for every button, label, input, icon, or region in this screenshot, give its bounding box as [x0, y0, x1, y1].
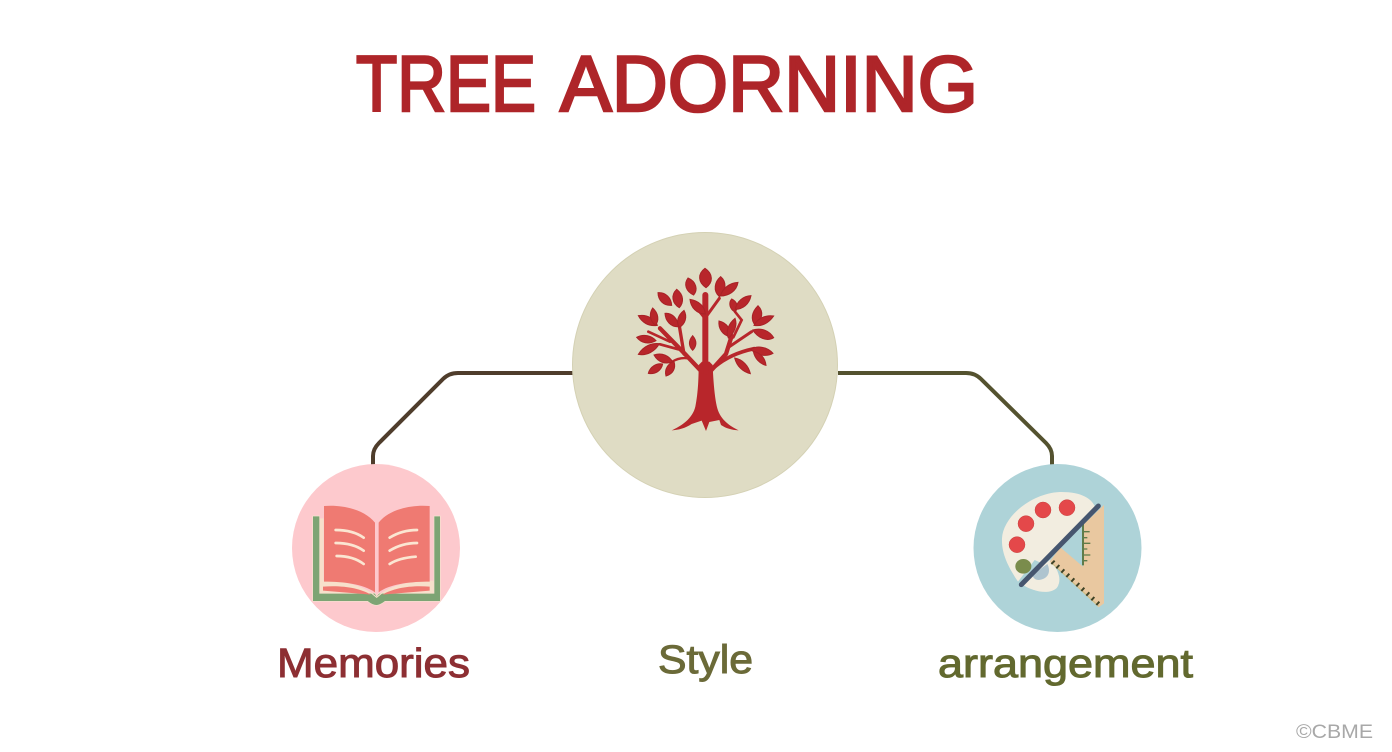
label: memories: Memories — [277, 640, 470, 686]
palette — [1002, 492, 1096, 592]
connector: tree to memories — [373, 373, 573, 465]
icon: palette and set square — [1002, 492, 1104, 607]
connector: tree to arrangement — [838, 373, 1052, 465]
icon: tree — [637, 268, 774, 431]
central node: tree — [572, 232, 838, 498]
node: memories — [292, 464, 460, 632]
title: TREE — [356, 39, 536, 128]
title: ADORNING — [560, 39, 978, 128]
watermark: ©CBME — [1296, 722, 1373, 743]
icon: open book — [313, 506, 440, 605]
set square — [1050, 505, 1104, 607]
paint wells — [1059, 500, 1075, 516]
label: arrangement: arrangement — [938, 642, 1193, 686]
brush — [1021, 506, 1098, 585]
leaves — [637, 268, 774, 376]
node: arrangement — [974, 464, 1142, 632]
label: style: Style — [658, 638, 753, 682]
